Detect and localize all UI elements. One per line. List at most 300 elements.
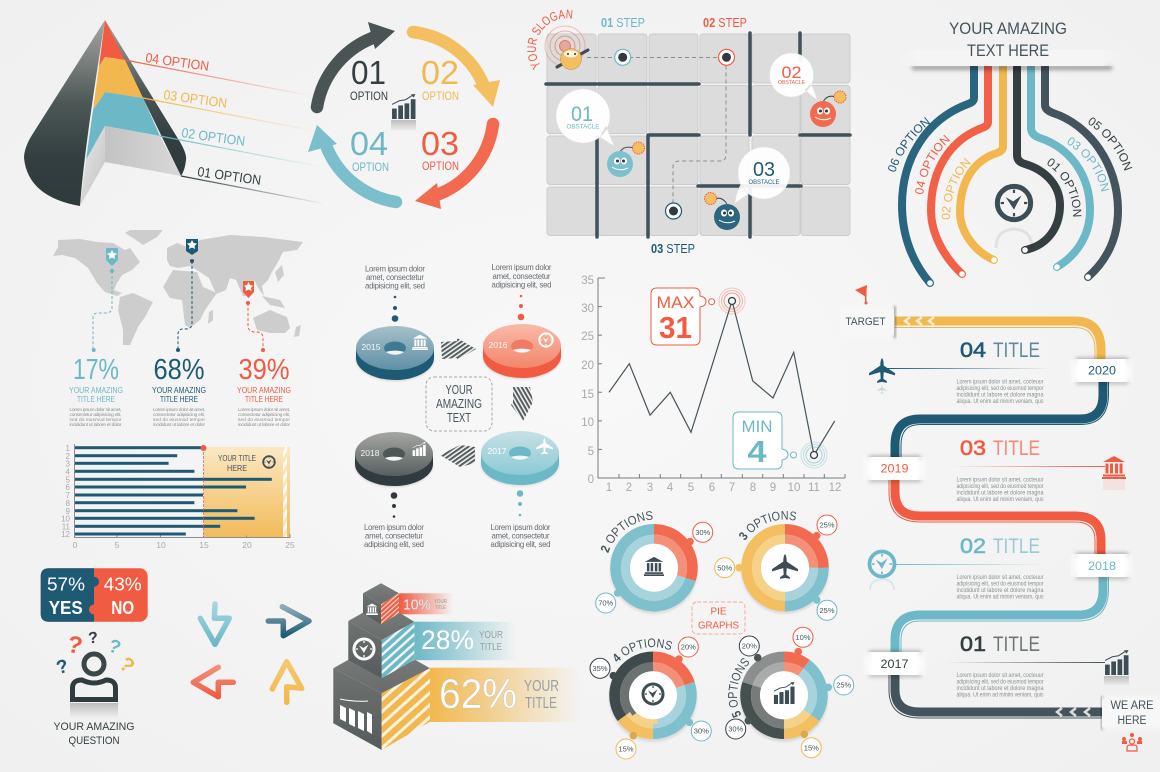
text 04 option: OPTION	[352, 160, 389, 174]
yes no card	[41, 568, 148, 622]
arrow down teal	[200, 604, 229, 644]
chart title	[218, 453, 256, 473]
lorem text: sed do eiusmod tempor	[238, 417, 290, 423]
lorem top left: adipisicing elit, sed	[365, 282, 425, 290]
x labels: 9	[770, 482, 776, 494]
pointer lines	[125, 60, 326, 204]
disk 2016	[483, 324, 561, 379]
lorem bottom left: adipisicing elit, sed	[364, 540, 424, 549]
disk 2017	[481, 431, 559, 486]
band red	[399, 593, 453, 614]
tag 2018: 2018	[1088, 559, 1116, 573]
disk 2017: 2017	[488, 446, 507, 456]
arrow down	[511, 387, 533, 421]
question marks: ?	[65, 631, 85, 660]
percent badges: 20%	[681, 643, 696, 652]
icon: target flag	[855, 285, 868, 304]
curved labels: 01 OPTION	[1048, 158, 1082, 216]
bubble 02	[770, 53, 817, 100]
lorem text: incididunt ut labore et dolor	[238, 422, 290, 428]
title 03: 03	[960, 437, 986, 460]
band yellow	[430, 668, 580, 722]
pie 3 options	[735, 526, 829, 614]
lorem 02: Lorem ipsum dolor sit amet, cocteuur	[956, 575, 1044, 581]
track red	[889, 480, 1101, 555]
y labels: 5	[66, 476, 71, 484]
target label	[840, 303, 896, 340]
bubble 01	[556, 89, 614, 146]
disk 2016: 2016	[489, 340, 508, 350]
max callout	[651, 288, 706, 345]
layer: red 04	[99, 20, 125, 66]
y labels: 12	[61, 530, 71, 539]
arrow 04 teal	[308, 125, 396, 202]
y labels: 11	[62, 522, 71, 532]
curved labels: 05 OPTION	[1088, 118, 1132, 171]
text 02 option: OPTION	[422, 89, 459, 103]
icon: chart	[391, 94, 416, 132]
line 02	[960, 67, 1003, 263]
lorem 01: aliqua. Ut enim ad minim veniam, quis	[956, 692, 1044, 698]
stat 39%: YOUR AMAZING	[237, 385, 291, 395]
block small	[363, 583, 399, 624]
y labels	[61, 444, 71, 539]
we are here label: WE ARE	[1110, 700, 1154, 712]
pin and route: red	[243, 281, 265, 352]
target label: TARGET	[846, 316, 886, 328]
center text box: YOUR	[446, 383, 472, 397]
bubble 03	[735, 147, 790, 203]
stat 68%: 68%	[154, 354, 204, 386]
step marker 03	[666, 203, 682, 219]
disk 2018: 2018	[361, 448, 380, 458]
band text 28%	[421, 625, 503, 655]
title: YOUR AMAZING	[949, 19, 1067, 38]
min callout: MIN	[742, 417, 772, 436]
label: 02 option: 02 OPTION	[181, 125, 246, 149]
y labels	[581, 275, 594, 486]
stat 17%	[69, 354, 123, 404]
question text: YOUR AMAZING	[54, 721, 134, 733]
layer: grey 01	[105, 126, 181, 176]
pie 4 options	[599, 642, 707, 749]
y labels: 35	[581, 275, 594, 287]
we are here label	[1101, 693, 1160, 733]
lorem 03	[956, 478, 1044, 503]
paper header	[895, 50, 1125, 66]
lorem bottom right: amet, consectetur	[492, 532, 550, 540]
bubble 03: OBSTACLE	[748, 180, 780, 186]
panel: disks	[355, 263, 561, 549]
center text box: AMAZING	[436, 397, 482, 411]
lorem bottom right: Lorem ipsum dolor	[490, 523, 551, 532]
stat 39%: 39%	[238, 354, 290, 386]
stat 17%: TITLE HERE	[77, 394, 115, 404]
lorem 01	[956, 673, 1044, 698]
stat 39%	[237, 354, 291, 404]
title 04: TITLE	[993, 339, 1040, 362]
label: 02 step: 02 STEP	[703, 16, 747, 30]
icon: clock small	[263, 456, 275, 468]
lorem top left	[365, 264, 425, 290]
max callout: 31	[659, 310, 692, 345]
yes no card: NO	[111, 598, 134, 618]
bubble 02: 02	[782, 63, 802, 82]
layer: yellow 03	[93, 57, 143, 110]
band text 10%: YOUR	[434, 599, 447, 605]
x labels: 0	[73, 540, 78, 550]
tag 2020	[1070, 358, 1133, 384]
title 02: TITLE	[993, 535, 1040, 558]
disk 2018	[355, 432, 433, 487]
person icon	[70, 654, 118, 718]
arrow right navy	[268, 607, 309, 636]
y labels: 10	[581, 417, 594, 429]
panel: pie graphs	[590, 511, 854, 760]
y labels: 9	[66, 507, 71, 516]
world map	[53, 230, 303, 345]
layer: teal 02	[86, 92, 160, 160]
lorem text: consectetur adipisicing elit,	[238, 412, 290, 418]
x labels: 5	[115, 540, 120, 550]
panel: curved option lines	[888, 19, 1132, 287]
percent badges: 10%	[795, 633, 811, 642]
title 02	[960, 535, 1040, 558]
lorem 04: incididunt ut labore et dolore magna	[956, 392, 1044, 398]
icon: clock	[996, 186, 1032, 248]
lorem text: sed do eiusmod tempor	[153, 417, 205, 423]
block large	[333, 641, 430, 750]
x labels	[73, 540, 295, 550]
lorem 02	[956, 575, 1044, 600]
x labels: 6	[709, 482, 715, 494]
line 05	[1045, 67, 1118, 280]
lorem text: consectetur adipisicing elit,	[70, 412, 122, 418]
lorem top right: Lorem ipsum dolor	[492, 263, 552, 272]
x labels: 1	[606, 482, 612, 494]
percent badges: 20%	[742, 642, 757, 651]
y labels: 2	[66, 452, 71, 461]
label: 03 step: 03 STEP	[651, 242, 695, 256]
line 06	[902, 67, 974, 286]
x labels: 12	[829, 482, 841, 494]
x labels: 8	[750, 482, 756, 494]
x labels: 20	[242, 540, 252, 550]
x labels: 11	[808, 482, 820, 494]
bubble 03: 03	[753, 159, 775, 181]
slogan rings	[545, 26, 585, 66]
percent badges: 30%	[695, 528, 711, 537]
curved labels	[888, 117, 1132, 220]
lorem 01: adipisicing elit, sed do eiusmod tempor	[956, 680, 1044, 686]
track navy	[895, 382, 1108, 458]
text 04 option: 04	[350, 125, 388, 162]
percent badges: 50%	[717, 563, 733, 572]
icon: people	[1122, 733, 1142, 751]
y labels: 7	[66, 491, 71, 500]
lorem 04	[956, 380, 1044, 405]
connector and icon: chart	[945, 650, 1129, 686]
band teal	[414, 622, 517, 660]
y labels: 5	[588, 446, 594, 458]
we are here label: HERE	[1118, 715, 1147, 727]
lorem text: Lorem ipsum dolor sit amet,	[153, 407, 205, 413]
lorem 04: aliqua. Ut enim ad minim veniam, qus	[956, 399, 1044, 405]
y labels: 20	[581, 360, 594, 372]
curved labels: 04 OPTION	[915, 134, 950, 194]
tag 2020: 2020	[1088, 364, 1116, 378]
percent badges: 15%	[618, 745, 634, 754]
label: 01 option: 01 OPTION	[197, 164, 262, 188]
label 4 options: 4 OPTIONS	[614, 638, 672, 662]
label 3 options: 3 OPTIONS	[739, 511, 796, 540]
percent badges: 15%	[804, 743, 819, 752]
lorem 03: Lorem ipsum dolor sit amet, cocteuur	[956, 478, 1044, 484]
disk 2015	[356, 326, 434, 381]
lorem text: sed do eiusmod tempor	[70, 417, 122, 423]
panel: bar chart	[61, 444, 295, 550]
x labels: 10	[156, 540, 166, 550]
x labels: 15	[199, 540, 209, 550]
y labels: 4	[66, 468, 71, 476]
layer: left white base	[80, 126, 105, 206]
line 01	[1017, 67, 1060, 253]
y labels: 10	[61, 514, 71, 524]
title 04	[960, 339, 1040, 362]
lorem text: Lorem ipsum dolor sit amet,	[238, 407, 290, 413]
y labels: 0	[588, 474, 594, 486]
walls	[546, 33, 850, 237]
connector and icon: bank	[950, 456, 1126, 490]
stat 17%: 17%	[73, 354, 119, 386]
step marker 01	[615, 49, 631, 65]
lorem 02: aliqua. Ut enim ad minim veniam, qus	[956, 594, 1044, 600]
disk 2015: 2015	[362, 342, 381, 352]
tag 2019: 2019	[880, 462, 909, 476]
question marks	[54, 630, 139, 679]
pie 5 options	[730, 642, 838, 749]
axes	[598, 278, 845, 478]
x labels: 2	[626, 482, 632, 494]
band text 62%: 62%	[439, 670, 517, 717]
arrow 03 red	[415, 124, 493, 209]
title 01: TITLE	[993, 633, 1040, 656]
band text 28%: YOUR	[479, 629, 503, 641]
title 01: 01	[960, 633, 986, 656]
slogan text: YOUR SLOGAN	[527, 10, 572, 70]
arrow 02 yellow	[413, 32, 500, 107]
lorem text	[70, 407, 290, 428]
title: TEXT HERE	[967, 41, 1049, 60]
band text 28%: 28%	[421, 625, 474, 655]
stat 68%	[152, 354, 206, 404]
x labels: 25	[285, 540, 295, 550]
panel: timeline	[840, 285, 1160, 751]
bomb teal	[607, 142, 644, 177]
arrow right	[441, 338, 476, 360]
stat 17%: YOUR AMAZING	[69, 385, 123, 395]
stat 68%: YOUR AMAZING	[152, 385, 206, 395]
y labels: 3	[66, 460, 71, 468]
chart title: YOUR TITLE	[218, 453, 256, 463]
lorem top right	[492, 263, 552, 290]
title 01	[960, 633, 1040, 656]
max marker	[709, 288, 745, 314]
band text 62%: YOUR	[524, 678, 559, 695]
lorem 03: aliqua. Ut enim ad minim veniam, qus	[956, 497, 1044, 503]
lorem bottom left	[364, 523, 424, 549]
panel: line chart	[581, 275, 845, 494]
pin and route: navy	[176, 239, 198, 352]
data line	[609, 301, 835, 455]
tag 2019	[863, 456, 926, 482]
line 03	[1031, 67, 1090, 270]
dashed route	[587, 58, 726, 211]
line 04	[931, 67, 988, 277]
label: 03 option: 03 OPTION	[163, 87, 228, 111]
bomb red	[810, 91, 846, 127]
lorem 03: adipisicing elit, sed do eiusmod tempor	[956, 484, 1044, 490]
yes no card: YES	[49, 598, 83, 618]
grid cells	[547, 34, 850, 236]
dots teal	[517, 490, 523, 516]
question text	[54, 721, 134, 747]
percent badges: 25%	[836, 681, 852, 690]
band text 28%: TITLE	[480, 641, 502, 653]
curved labels: 03 OPTION	[1068, 137, 1110, 192]
arrow up yellow	[272, 662, 302, 702]
arrow left red	[193, 667, 233, 697]
lorem 03: incididunt ut labore et dolore magna	[956, 490, 1044, 496]
y labels: 1	[66, 444, 71, 453]
tag 2017: 2017	[880, 657, 909, 671]
lorem bottom right	[490, 523, 551, 549]
paper header shadow	[912, 65, 1112, 70]
pyramid right dark edge	[105, 20, 186, 176]
y labels: 6	[66, 483, 71, 492]
band text 62%: TITLE	[525, 695, 557, 712]
yes no card: 43%	[104, 574, 142, 594]
panel: four arrows	[193, 604, 309, 702]
lorem top left: amet, consectetur	[366, 273, 424, 282]
percent badges: 70%	[598, 599, 614, 608]
lorem top left: Lorem ipsum dolor	[365, 264, 425, 274]
yes no card: 57%	[47, 574, 85, 594]
band text 10%: TITLE	[435, 605, 447, 611]
panel: iso blocks	[333, 583, 580, 750]
percent badges: 30%	[694, 727, 709, 736]
title 03	[960, 437, 1040, 460]
y labels: 25	[581, 331, 594, 343]
min callout: 4	[748, 434, 767, 469]
pie graphs label: GRAPHS	[698, 620, 739, 632]
marker line	[200, 445, 206, 537]
label: 04 option: 04 OPTION	[145, 50, 210, 74]
curved labels: 06 OPTION	[888, 117, 930, 172]
y labels: 15	[581, 389, 594, 401]
percent badges: 25%	[819, 521, 835, 530]
panel: circular arrows	[308, 22, 500, 209]
y labels: 30	[581, 303, 594, 315]
connector and icon: clock	[870, 552, 1045, 590]
step marker 02	[718, 49, 734, 65]
text 01 option: 01	[351, 54, 386, 91]
connector and icon: plane	[869, 358, 1051, 394]
tag 2017	[863, 651, 926, 677]
dots red	[518, 295, 524, 320]
center text box	[426, 377, 492, 431]
text 02 option: 02	[421, 54, 459, 91]
percent badges	[590, 515, 854, 759]
x labels	[606, 482, 841, 494]
bubble 01: 01	[571, 103, 593, 126]
pin and route: teal	[92, 248, 118, 352]
label: 01 step: 01 STEP	[601, 16, 645, 30]
lorem 01: incididunt ut labore et dolore magna	[956, 686, 1044, 692]
label 2 options: 2 OPTIONS	[600, 511, 653, 553]
pie graphs label	[692, 602, 745, 634]
max callout: MAX	[656, 293, 694, 312]
band text 10%	[403, 596, 447, 614]
title 04: 04	[960, 339, 986, 362]
lorem 04: adipisicing elit, sed do eiusmod tempor	[956, 386, 1044, 392]
lorem top right: amet, consectetur	[492, 272, 551, 281]
axes	[74, 444, 290, 538]
bars	[74, 446, 272, 536]
panel: pyramid chart	[24, 20, 326, 206]
title 02: 02	[960, 535, 986, 558]
dots navy	[392, 296, 398, 322]
panel: world map stats	[53, 230, 303, 428]
x labels: 3	[647, 482, 653, 494]
stripe column	[283, 447, 287, 537]
title 03: TITLE	[993, 437, 1040, 460]
band text 10%: 10%	[403, 596, 431, 614]
question marks: ?	[87, 630, 99, 647]
tag 2018	[1070, 553, 1133, 579]
arrow left	[440, 445, 475, 467]
arrow 01 dark	[317, 22, 395, 107]
x labels: 4	[667, 482, 674, 494]
panel: yes no question	[41, 568, 148, 747]
center text box: TEXT	[447, 411, 471, 425]
percent badges: 25%	[819, 606, 835, 615]
lorem text: incididunt ut labore et dolor	[153, 422, 205, 428]
question marks: ?	[54, 656, 71, 679]
x labels: 10	[788, 482, 800, 494]
x labels: 5	[688, 482, 694, 494]
lorem text: consectetur adipisicing elit,	[153, 412, 205, 418]
question marks: ?	[105, 636, 124, 659]
chart title: HERE	[227, 463, 247, 473]
character	[557, 48, 588, 70]
lorem bottom left: Lorem ipsum dolor	[364, 523, 424, 532]
track yellow	[895, 317, 1101, 360]
lorem 01: Lorem ipsum dolor sit amet, cocteuur	[956, 673, 1044, 679]
text 03 option: 03	[421, 125, 459, 162]
min marker	[790, 442, 827, 468]
block medium	[348, 602, 414, 678]
y labels: 8	[66, 499, 71, 508]
lorem top right: adipisicing elit, sed	[492, 280, 552, 290]
label 5 options: 5 OPTIONS	[728, 658, 749, 718]
text 01 option: OPTION	[350, 89, 388, 103]
panel: maze steps	[527, 10, 852, 256]
text 03 option: OPTION	[422, 159, 459, 173]
x labels: 7	[729, 482, 735, 494]
lorem bottom left: amet, consectetur	[365, 532, 423, 540]
dots dark	[391, 492, 397, 518]
